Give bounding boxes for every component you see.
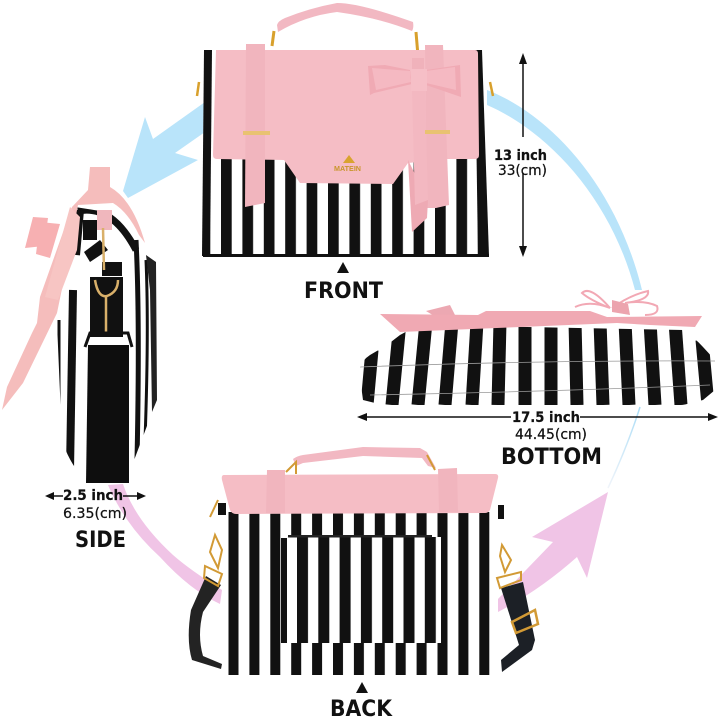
handle bbox=[277, 3, 413, 32]
stripes body bbox=[360, 326, 715, 405]
dimension: depth text bbox=[63, 488, 127, 522]
shoulder strap right bbox=[501, 582, 535, 672]
side rings bbox=[197, 82, 493, 96]
logo: MATEIN bbox=[334, 166, 361, 173]
dimension: depth text: 2.5 inch bbox=[63, 488, 123, 504]
dimension: height text: 33(cm) bbox=[498, 163, 547, 179]
dimension: depth arrows bbox=[45, 492, 146, 500]
dimension: width text: 44.45(cm) bbox=[515, 427, 587, 443]
bag: side view bbox=[2, 167, 165, 490]
flap bbox=[222, 474, 498, 514]
shoulder strap left bbox=[189, 576, 222, 669]
logo bbox=[334, 155, 361, 173]
dimension: depth text: 6.35(cm) bbox=[63, 506, 127, 522]
arrow: blue arc from front to bottom bbox=[487, 90, 642, 488]
outer side strap bbox=[146, 255, 157, 412]
right strap and hanging tails bbox=[408, 45, 449, 232]
side body bbox=[58, 208, 149, 466]
marker: front triangle bbox=[337, 262, 349, 273]
dimension: width text bbox=[512, 410, 587, 443]
arrow: pink arrow from back to bottom bbox=[497, 492, 608, 612]
back handle bbox=[293, 447, 436, 468]
dimension: height text bbox=[494, 148, 547, 179]
label: BOTTOM: BOTTOM bbox=[501, 445, 602, 470]
bag: front view bbox=[197, 3, 493, 257]
arrow: pink arc from side to back bbox=[108, 484, 222, 604]
arrow: blue arrowhead toward side view bbox=[123, 102, 205, 198]
marker: back triangle bbox=[356, 682, 368, 693]
strap hooks bbox=[272, 31, 418, 56]
bag: bottom view bbox=[355, 291, 720, 410]
belts bbox=[266, 468, 458, 513]
zip and black tabs bbox=[83, 220, 123, 337]
hardware bbox=[204, 455, 538, 633]
label: SIDE: SIDE bbox=[75, 528, 126, 553]
gold ring and hook bbox=[95, 228, 118, 332]
bow string bbox=[575, 291, 658, 315]
flap edge bbox=[380, 311, 702, 332]
dimension: width text: 17.5 inch bbox=[512, 410, 580, 426]
label: FRONT: FRONT bbox=[304, 279, 383, 304]
body bbox=[228, 512, 498, 675]
dimension: width arrows bbox=[357, 413, 718, 421]
bag: back view bbox=[189, 447, 538, 675]
shoulder strap bbox=[85, 333, 132, 483]
pink flap bbox=[2, 167, 145, 410]
buckles bbox=[243, 130, 450, 135]
flap bbox=[213, 50, 479, 184]
dimension: height text: 13 inch bbox=[494, 148, 547, 164]
side bow bbox=[25, 217, 60, 258]
pocket bbox=[281, 535, 441, 643]
body bbox=[202, 50, 489, 256]
left strap bbox=[245, 44, 265, 207]
dimension: height arrow bbox=[519, 53, 527, 257]
bow bbox=[368, 58, 461, 97]
